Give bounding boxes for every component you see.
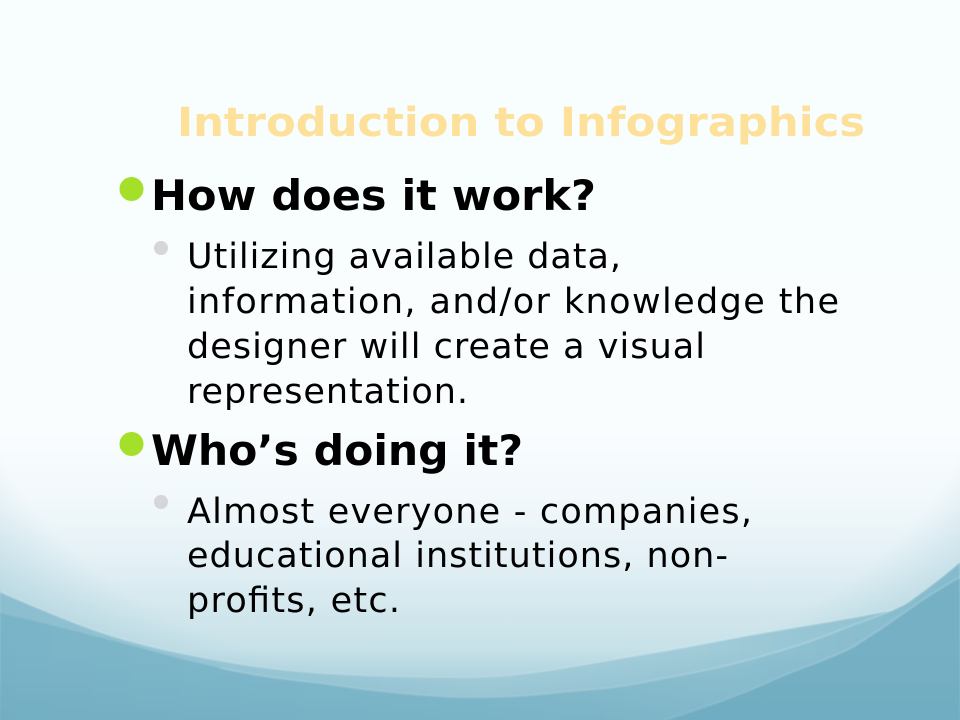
text block: how it works description: representation. — [187, 372, 468, 412]
text block: who is doing it description: profits, etc. — [187, 581, 400, 621]
section: who's doing it — [120, 426, 752, 621]
text block: how it works description: information, and/or knowledge the — [187, 282, 839, 322]
text block: how it works description: designer will create a visual — [187, 327, 705, 367]
icon: green bullet — [120, 177, 144, 201]
icon: grey bullet — [154, 495, 168, 509]
icon: grey bullet — [154, 241, 168, 255]
section: how does it work — [120, 171, 839, 412]
text block: who is doing it description: Almost everyone - companies, — [187, 492, 752, 532]
heading: who's doing it: Who’s doing it? — [151, 426, 523, 475]
icon: green bullet — [120, 432, 144, 456]
text block: how it works description — [187, 237, 839, 412]
text block: who is doing it description: educational institutions, non- — [187, 536, 728, 576]
title: Introduction to Infographics — [177, 100, 865, 146]
heading: how does it work: How does it work? — [151, 171, 596, 220]
text block: who is doing it description — [187, 492, 752, 621]
text block: how it works description: Utilizing available data, — [187, 237, 621, 277]
